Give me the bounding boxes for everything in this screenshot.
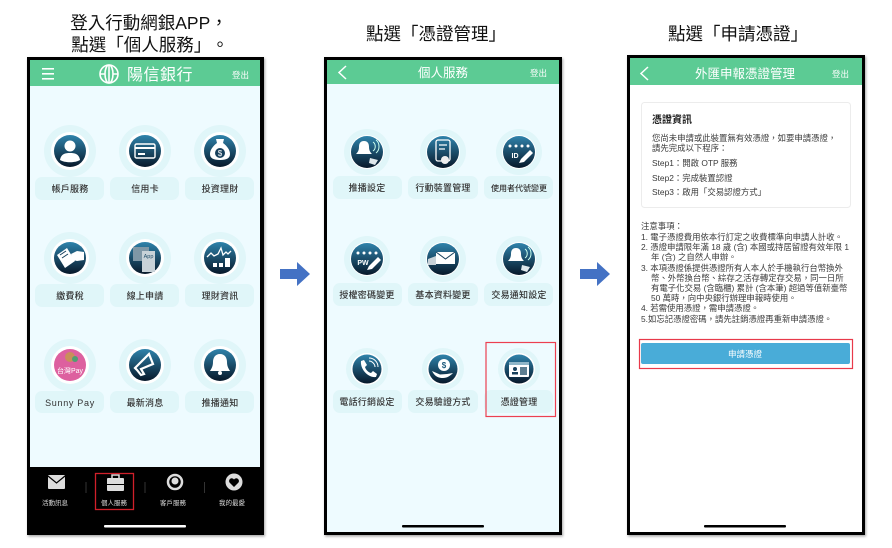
menu item: verification method: $ [442, 361, 447, 370]
menu item: transaction notice: 交易通知設定 [491, 289, 547, 300]
title: step 1 [70, 13, 229, 55]
bank name: 陽信銀行 [127, 66, 193, 84]
nav: favorites: 我的最愛 [219, 498, 246, 507]
highlight: apply button [640, 340, 852, 368]
menu item: investment: $ [218, 149, 223, 158]
menu item: Sunny Pay: 台灣Pay [57, 366, 84, 375]
menu item: certificate management [484, 348, 553, 413]
logout: 登出 [832, 69, 849, 79]
highlight: personal services [96, 474, 134, 510]
icon: back [339, 66, 346, 79]
notes: 50 萬時，向中央銀行辦理申報時使用。 [651, 293, 797, 303]
logout: 登出 [530, 68, 547, 78]
nav: customer service: 客戶服務 [160, 498, 186, 507]
menu item: verification method [408, 348, 478, 413]
nav: messages: 活動訊息 [42, 498, 68, 507]
notes: 年 (含) 之自然人申辦。 [651, 252, 737, 262]
icon: bank logo [100, 65, 118, 83]
nav: favorites [219, 474, 246, 507]
menu item: push notice: 推播通知 [202, 397, 238, 408]
notes: 2. 憑證申請限年滿 18 歲 (含) 本國或持居留證有效年限 1 [641, 242, 849, 252]
menu item: online application: App [144, 254, 153, 260]
menu item: push settings: 推播設定 [349, 182, 385, 193]
card: certificate information: Step2：完成裝置認證 [652, 173, 733, 183]
notes: 注意事項： [641, 221, 683, 231]
nav: personal services: 個人服務 [101, 498, 128, 507]
menu item: telemarketing [333, 348, 402, 413]
bottom navigation [42, 474, 246, 528]
menu item: pay tax [35, 232, 104, 307]
menu item: transaction notice [484, 236, 553, 306]
menu item: credit card: 信用卡 [131, 183, 159, 194]
icon: back [641, 67, 648, 80]
menu item: password change: PW [357, 260, 369, 267]
home indicator [402, 525, 484, 528]
notes: 幣、外幣換台幣、綜存之活存轉定存交易，同一日所 [651, 273, 844, 283]
menu item: certificate management: 憑證管理 [501, 396, 537, 407]
header title: 個人服務 [418, 66, 468, 80]
notes: 有電子化交易 (含臨櫃) 累計 (含本筆) 超過等值新臺幣 [651, 283, 848, 293]
arrow: step 1 to 2 [280, 262, 310, 286]
menu item: device management: 行動裝置管理 [415, 182, 471, 193]
card: certificate information: Step3：啟用「交易認證方式」 [652, 187, 766, 197]
card: certificate information: 憑證資訊 [652, 113, 692, 126]
menu item: user ID change: ID [512, 153, 518, 160]
notes: 3. 本項憑證係提供憑證所有人本人於手機執行台幣換外 [641, 263, 844, 273]
menu item: news: 最新消息 [127, 397, 163, 408]
highlight: certificate management [486, 342, 556, 416]
home indicator [704, 525, 786, 528]
notes: 5.如忘記憑證密碼，請先註銷憑證再重新申請憑證。 [641, 314, 832, 324]
menu item: telemarketing: 電話行銷設定 [339, 396, 395, 407]
nav: messages [42, 475, 68, 507]
nav: personal services [101, 475, 128, 507]
menu item: wealth info: 理財資訊 [202, 290, 238, 301]
menu item: basic data change: 基本資料變更 [415, 289, 471, 300]
home indicator [104, 525, 186, 528]
menu item: push notice [185, 339, 254, 413]
menu item: user ID change [484, 129, 553, 199]
menu item: wealth info [185, 232, 254, 307]
menu item: basic data change [408, 236, 478, 306]
menu item: account: 帳戶服務 [52, 183, 88, 194]
menu item: device management [408, 129, 478, 199]
title: step 1: 點選「個人服務」。 [71, 35, 229, 55]
menu item: online application: 線上申請 [127, 290, 163, 301]
menu item: credit card [110, 125, 179, 200]
button: apply for certificate: 申請憑證 [728, 349, 762, 359]
menu item: news [110, 339, 179, 413]
logout: 登出 [232, 70, 249, 80]
panel: phone 1 main menu [27, 57, 264, 535]
title: step 3: 點選「申請憑證」 [668, 24, 808, 44]
title: step 2: 點選「憑證管理」 [366, 24, 506, 44]
card: certificate information: Step1：開啟 OTP 服務 [652, 158, 738, 168]
arrow: step 2 to 3 [580, 262, 610, 286]
menu item: user ID change: 使用者代號變更 [491, 183, 547, 193]
header title: 外匯申報憑證管理 [695, 66, 795, 81]
menu item: investment [185, 125, 254, 200]
menu item: password change [333, 236, 402, 306]
panel: phone 3 certificate application [627, 55, 865, 535]
menu item: account [35, 125, 104, 200]
panel: phone 2 personal services [324, 57, 562, 535]
card: certificate information [642, 102, 850, 208]
menu item: investment: 投資理財 [202, 183, 238, 194]
icon: hamburger menu [42, 68, 54, 80]
menu item: push settings [333, 129, 402, 199]
nav: customer service [160, 475, 186, 507]
notes: 4. 若需使用憑證，需申請憑證。 [641, 303, 759, 313]
menu item: Sunny Pay: Sunny Pay [45, 398, 95, 408]
menu item: pay tax: 繳費稅 [56, 290, 84, 301]
menu item: Sunny Pay [35, 339, 104, 413]
menu item: password change: 授權密碼變更 [339, 289, 395, 300]
menu item: online application [110, 232, 179, 307]
title: step 1: 登入行動網銀APP， [70, 13, 228, 33]
button: apply for certificate [641, 343, 850, 364]
menu item: verification method: 交易驗證方式 [415, 396, 471, 407]
notes [641, 221, 849, 324]
card: certificate information: 請先完成以下程序： [652, 143, 727, 153]
card: certificate information: 您尚未申請或此裝置無有效憑證，如要申請憑證， [652, 133, 836, 143]
notes: 1. 電子憑證費用依本行訂定之收費標準向申請人計收。 [641, 232, 843, 242]
